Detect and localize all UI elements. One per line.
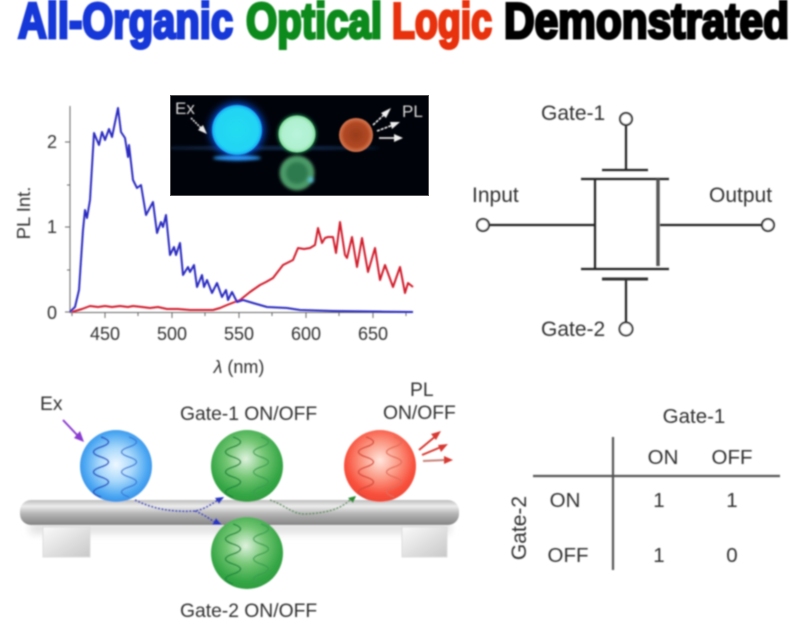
x axis title: λ (nm) — [213, 357, 264, 377]
terminal: Input — [477, 219, 489, 231]
green energy transfer arrow — [270, 496, 356, 514]
y axis labels: 1 — [47, 217, 57, 237]
gate labels: Input — [472, 184, 519, 207]
red PL curve — [72, 222, 413, 312]
blue sphere — [80, 430, 152, 502]
chart axes — [65, 106, 413, 318]
Ex arrow — [191, 118, 207, 134]
red emission arrows — [419, 431, 453, 464]
rod shadow — [30, 522, 450, 534]
x axis labels: 650 — [358, 324, 388, 344]
truth table — [508, 405, 780, 570]
table values: 1 — [653, 489, 665, 512]
right channel — [656, 179, 660, 266]
gate labels: Gate-2 — [541, 318, 605, 341]
row header: Gate-2 — [508, 496, 531, 560]
table values: 1 — [653, 544, 665, 567]
green sphere — [278, 116, 316, 152]
left support — [43, 527, 90, 557]
green sphere reflection — [280, 156, 314, 190]
table values: OFF — [548, 544, 588, 567]
diagram labels: ON/OFF — [383, 403, 456, 424]
x axis labels: 500 — [157, 324, 187, 344]
chart: PL spectrum — [13, 106, 413, 377]
gate labels: Output — [709, 184, 772, 207]
PL arrows — [373, 108, 403, 142]
diagram labels: Gate-1 ON/OFF — [180, 404, 317, 425]
diagram labels: PL — [410, 380, 434, 401]
x axis labels: 550 — [224, 324, 254, 344]
terminal: Gate-2 — [620, 322, 632, 336]
x axis labels: 600 — [291, 324, 321, 344]
molecular wire diagram — [20, 380, 459, 620]
column header: Gate-1 — [663, 405, 725, 428]
table values: 1 — [726, 489, 738, 512]
logic gate schematic — [472, 102, 774, 341]
y axis labels: 2 — [47, 132, 57, 152]
Ex label: Ex — [175, 99, 195, 118]
PL label: PL — [402, 102, 423, 121]
table values: OFF — [712, 446, 752, 469]
table rules — [533, 437, 780, 570]
gate labels: Gate-1 — [541, 102, 605, 125]
lower gate bar — [602, 278, 648, 280]
diagram labels — [40, 380, 456, 620]
gate labels — [472, 102, 772, 341]
green sphere: gate 2 — [211, 517, 283, 589]
right support — [402, 527, 447, 557]
table values: 0 — [726, 544, 738, 567]
diagram labels: Ex — [40, 394, 63, 415]
blue sphere — [212, 105, 262, 155]
x axis labels: 450 — [90, 324, 120, 344]
blue energy transfer arrows — [135, 497, 224, 525]
table values: ON — [648, 446, 678, 469]
y axis labels: 0 — [47, 303, 57, 323]
photo inset: glowing spheres — [160, 95, 429, 196]
blue PL curve — [70, 108, 413, 312]
terminal: Gate-1 — [620, 113, 632, 125]
Ex arrow — [63, 420, 84, 442]
title — [18, 0, 789, 49]
table values: ON — [550, 489, 580, 512]
y axis title: PL Int. — [13, 187, 34, 239]
green sphere: gate 1 — [211, 430, 283, 502]
red sphere — [344, 430, 416, 502]
rod — [20, 500, 459, 525]
gate lines — [489, 125, 762, 322]
terminal: Output — [762, 219, 774, 231]
y axis labels — [47, 132, 57, 323]
table values — [548, 446, 752, 567]
x axis labels — [90, 324, 388, 344]
orange sphere — [339, 118, 373, 152]
